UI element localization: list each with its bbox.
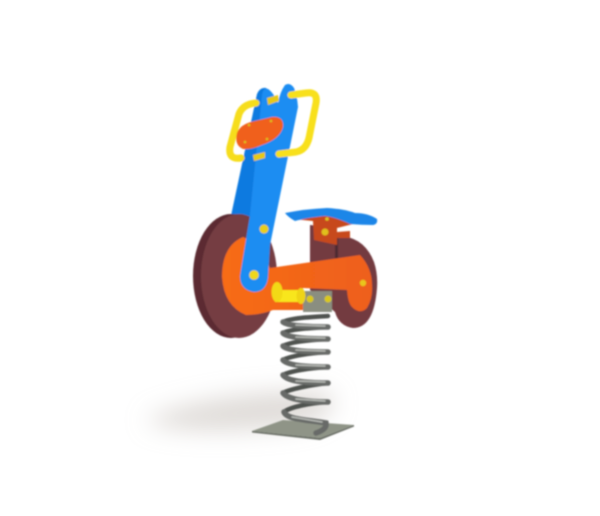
metal bracket	[303, 291, 332, 312]
yellow handlebar, front right	[279, 93, 316, 154]
blue arm, front face	[240, 84, 298, 292]
base plate	[252, 420, 354, 440]
rear wheel and seat post	[310, 225, 377, 328]
ground shadow	[145, 391, 334, 431]
blue arm, rear face	[229, 88, 273, 225]
front wheel front disc	[201, 214, 277, 338]
spring	[283, 316, 328, 433]
seat bracket	[293, 213, 353, 245]
front wheel back disc	[193, 214, 269, 338]
seat	[285, 208, 377, 225]
orange headlight	[236, 117, 283, 149]
yellow handlebar, rear left	[230, 103, 256, 158]
yellow connector pins	[253, 95, 279, 161]
orange body	[222, 237, 372, 315]
yellow foot peg	[272, 282, 306, 304]
